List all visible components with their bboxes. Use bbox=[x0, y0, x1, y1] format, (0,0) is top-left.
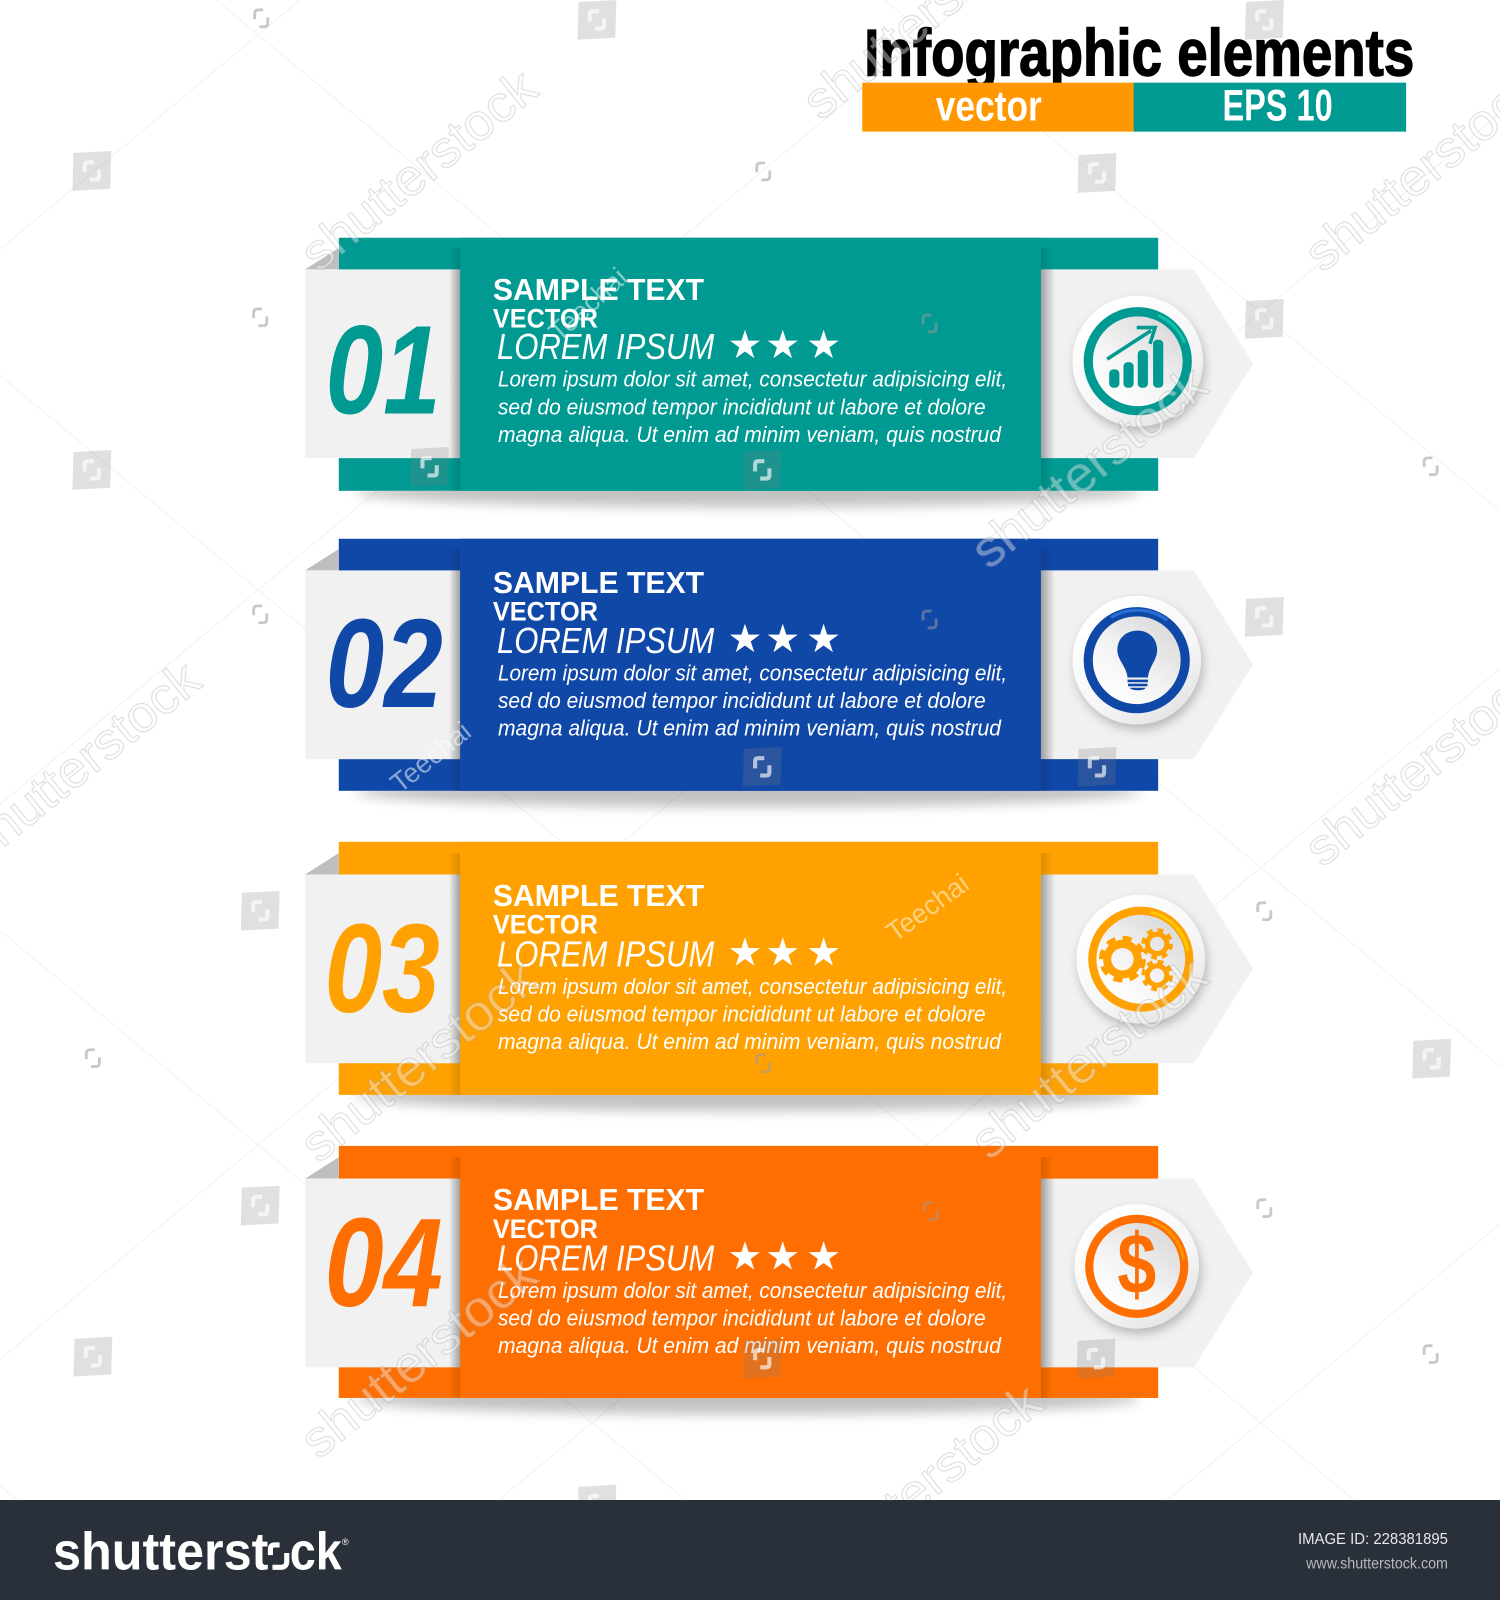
number 04: 04 bbox=[324, 1191, 443, 1333]
fold triangle bbox=[305, 248, 339, 269]
body text: sed do eiusmod tempor incididunt ut labore et dolore bbox=[498, 1001, 986, 1026]
lorem ipsum line: LOREM IPSUM bbox=[497, 1238, 715, 1278]
three stars: ★★★ bbox=[728, 618, 841, 661]
back band bbox=[339, 238, 1158, 491]
watermarks: shutterstock bbox=[960, 355, 1218, 579]
teal label bar bbox=[1134, 79, 1406, 132]
three stars: ★★★ bbox=[728, 324, 841, 367]
main colour panel bbox=[460, 842, 1041, 1095]
arrow tab bbox=[1041, 570, 1253, 759]
panel: card 01 teal bbox=[305, 238, 1253, 507]
body text bbox=[498, 661, 1007, 741]
heading text: SAMPLE TEXT bbox=[493, 273, 704, 307]
orange label bar bbox=[862, 82, 1135, 132]
watermarks: Teechai bbox=[880, 867, 974, 948]
watermarks: Teechai bbox=[542, 261, 633, 347]
lorem ipsum line: LOREM IPSUM bbox=[497, 327, 715, 367]
body text bbox=[498, 974, 1007, 1054]
body text: magna aliqua. Ut enim ad minim veniam, quis nostrud bbox=[498, 1333, 1002, 1358]
sub heading: VECTOR bbox=[493, 596, 598, 626]
number tab bbox=[305, 874, 460, 1063]
number 03: 03 bbox=[324, 897, 440, 1039]
main colour panel bbox=[460, 1146, 1041, 1398]
body text: sed do eiusmod tempor incididunt ut labore et dolore bbox=[498, 1306, 986, 1331]
watermarks: shutterstock bbox=[795, 1372, 1053, 1596]
heading text: SAMPLE TEXT bbox=[493, 566, 704, 600]
main colour panel bbox=[460, 238, 1041, 491]
fold triangle bbox=[305, 549, 339, 570]
number 01: 01 bbox=[326, 298, 441, 440]
body text: Lorem ipsum dolor sit amet, consectetur adipisicing elit, bbox=[498, 367, 1007, 392]
footer logo: shutterst bbox=[53, 1522, 269, 1581]
body text: magna aliqua. Ut enim ad minim veniam, quis nostrud bbox=[498, 716, 1002, 741]
arrow tab bbox=[1041, 269, 1253, 458]
heading text: SAMPLE TEXT bbox=[493, 879, 704, 913]
image id: IMAGE ID: 228381895 bbox=[1298, 1531, 1448, 1548]
body text bbox=[498, 367, 1007, 447]
website: www.shutterstock.com bbox=[1305, 1555, 1448, 1572]
panel: card 03 amber bbox=[305, 842, 1253, 1111]
lorem ipsum line: LOREM IPSUM bbox=[497, 621, 715, 661]
sub heading: VECTOR bbox=[493, 910, 598, 940]
body text bbox=[498, 1278, 1007, 1358]
icon: gears button bbox=[1077, 895, 1205, 1023]
arrow tab bbox=[1041, 1179, 1253, 1367]
back band bbox=[339, 842, 1158, 1095]
three stars: ★★★ bbox=[728, 931, 841, 974]
teal label bar: EPS 10 bbox=[1222, 79, 1333, 130]
body text: Lorem ipsum dolor sit amet, consectetur adipisicing elit, bbox=[498, 661, 1007, 686]
footer bar bbox=[0, 1500, 1500, 1600]
watermarks: Teechai bbox=[384, 715, 477, 799]
panel: card 02 blue bbox=[305, 539, 1253, 807]
main colour panel bbox=[460, 539, 1041, 791]
watermarks: shutterstock bbox=[289, 58, 548, 282]
body text: Lorem ipsum dolor sit amet, consectetur adipisicing elit, bbox=[498, 974, 1007, 999]
heading text: SAMPLE TEXT bbox=[493, 1183, 704, 1217]
watermarks: shutterstock bbox=[960, 945, 1218, 1170]
icon: dollar button: $ bbox=[1117, 1216, 1156, 1312]
lorem ipsum line: LOREM IPSUM bbox=[497, 934, 715, 974]
header title bbox=[862, 17, 1414, 132]
panel: card 04 orange bbox=[305, 1146, 1253, 1414]
body text: sed do eiusmod tempor incididunt ut labore et dolore bbox=[498, 394, 986, 419]
fold triangle bbox=[305, 853, 339, 874]
icon: light bulb button bbox=[1072, 596, 1201, 724]
number tab bbox=[305, 570, 460, 759]
footer logo: ck bbox=[290, 1522, 342, 1581]
footer logo: ® bbox=[342, 1537, 349, 1547]
body text: magna aliqua. Ut enim ad minim veniam, quis nostrud bbox=[498, 422, 1002, 447]
number tab bbox=[305, 269, 460, 458]
watermarks: shutterstock bbox=[289, 948, 548, 1173]
back band bbox=[339, 539, 1158, 791]
arrow tab bbox=[1041, 874, 1253, 1063]
number tab bbox=[305, 1179, 460, 1367]
back band bbox=[339, 1146, 1158, 1398]
icon: dollar button bbox=[1074, 1204, 1199, 1329]
three stars: ★★★ bbox=[728, 1235, 841, 1278]
body text: magna aliqua. Ut enim ad minim veniam, quis nostrud bbox=[498, 1029, 1002, 1054]
watermarks: shutterstock bbox=[289, 1244, 548, 1469]
number 02: 02 bbox=[326, 592, 443, 734]
sub heading: VECTOR bbox=[493, 304, 598, 334]
fold triangle bbox=[305, 1157, 339, 1179]
body text: sed do eiusmod tempor incididunt ut labore et dolore bbox=[498, 688, 986, 713]
sub heading: VECTOR bbox=[493, 1214, 598, 1244]
orange label bar: vector bbox=[936, 82, 1042, 130]
body text: Lorem ipsum dolor sit amet, consectetur adipisicing elit, bbox=[498, 1278, 1007, 1303]
icon: growth chart button bbox=[1072, 296, 1203, 427]
